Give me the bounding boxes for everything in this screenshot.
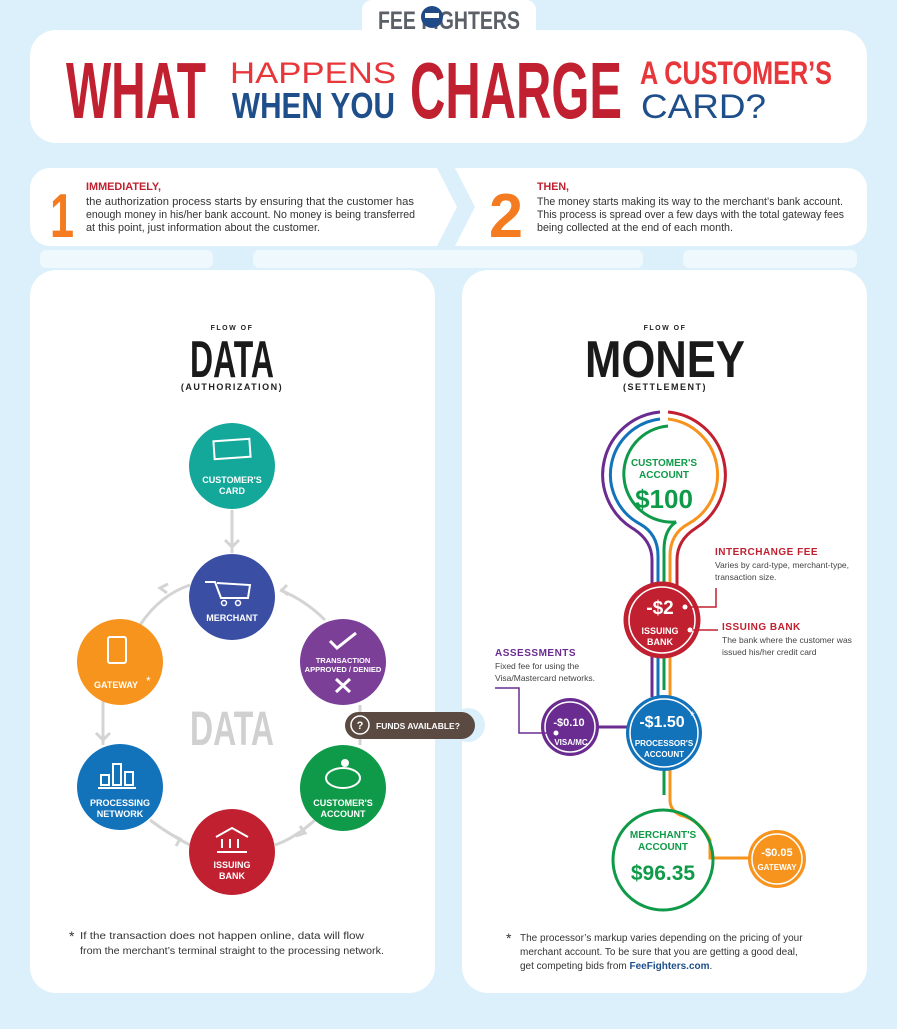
callout: assessments: ASSESSMENTS bbox=[495, 648, 576, 659]
node: merchant's account: $96.35 bbox=[631, 862, 695, 885]
node: customer's card: CARD bbox=[219, 486, 245, 496]
callout: assessments bbox=[495, 648, 595, 736]
node: customer's account $100: ACCOUNT bbox=[639, 470, 689, 481]
node: transaction approved / denied: APPROVED / DENIED bbox=[305, 665, 382, 674]
footnote: data: * bbox=[69, 928, 75, 944]
node: gateway: * bbox=[146, 674, 151, 688]
node: processing network: PROCESSING bbox=[90, 798, 150, 808]
node: merchant bbox=[189, 554, 275, 640]
node: visa/mc: VISA/MC bbox=[554, 738, 588, 747]
node: gateway fee bbox=[748, 830, 806, 888]
node: processor's account: ACCOUNT bbox=[644, 750, 684, 759]
heading: flow of money: FLOW OF bbox=[644, 325, 686, 332]
node: customer's account bbox=[300, 745, 386, 831]
node: gateway fee: -$0.05 bbox=[761, 847, 793, 859]
node: processor's account: * bbox=[690, 709, 695, 723]
node: issuing bank -$2: ISSUING bbox=[641, 626, 679, 636]
node: customer's account $100: CUSTOMER'S bbox=[631, 458, 697, 469]
step 1: at this point, just information about the customer. bbox=[86, 222, 320, 234]
callout: funds available bbox=[345, 708, 485, 742]
panel: flow of money bbox=[462, 270, 867, 993]
step 1: the authorization process starts by ensuring that the customer has bbox=[86, 196, 415, 208]
node: processing network: NETWORK bbox=[97, 809, 144, 819]
heading: flow of money: MONEY bbox=[585, 331, 745, 389]
node: visa/mc: -$0.10 bbox=[553, 717, 585, 729]
callout: assessments: Visa/Mastercard networks. bbox=[495, 673, 595, 683]
callout: issuing bank: issued his/her credit card bbox=[722, 647, 817, 657]
step 2: 2 bbox=[489, 182, 523, 251]
heading: flow of money: (SETTLEMENT) bbox=[623, 382, 707, 392]
node: customer's account: CUSTOMER'S bbox=[313, 798, 373, 808]
heading: flow of data: FLOW OF bbox=[211, 325, 253, 332]
node: issuing bank: BANK bbox=[219, 871, 245, 881]
node: issuing bank -$2: BANK bbox=[647, 637, 673, 647]
callout: assessments: Fixed fee for using the bbox=[495, 661, 579, 671]
footnote: money: * bbox=[506, 930, 512, 946]
node: customer's account $100 bbox=[631, 458, 697, 514]
node: merchant's account bbox=[613, 810, 713, 910]
callout: interchange fee bbox=[682, 547, 849, 610]
callout: interchange fee: INTERCHANGE FEE bbox=[715, 547, 818, 558]
title: A CUSTOMER’S bbox=[640, 55, 832, 91]
title: CHARGE bbox=[410, 46, 622, 135]
node: transaction approved / denied bbox=[300, 619, 386, 705]
footnote: data: If the transaction does not happen online, data will flow bbox=[80, 931, 365, 942]
step 2 bbox=[489, 181, 844, 251]
step 1: 1 bbox=[50, 182, 74, 251]
watermark: DATA: DATA bbox=[190, 703, 274, 756]
node: processing network bbox=[77, 744, 163, 830]
node: customer's account: ACCOUNT bbox=[320, 809, 366, 819]
callout: funds available: ? bbox=[357, 720, 364, 732]
node: gateway bbox=[77, 619, 163, 705]
money lines bbox=[595, 412, 752, 858]
node: customer's card: CUSTOMER'S bbox=[202, 475, 262, 485]
footnote: money: The processor’s markup varies depending on the pricing of your bbox=[520, 933, 803, 944]
logo tab: FEE FIGHTERS bbox=[378, 7, 520, 35]
footnote: data: from the merchant’s terminal straight to the processing network. bbox=[80, 946, 384, 957]
panel: flow of data bbox=[30, 270, 435, 993]
steps box bbox=[30, 168, 867, 251]
node: merchant's account: ACCOUNT bbox=[638, 842, 688, 853]
step 1: enough money in his/her bank account. No money is being transferred bbox=[86, 209, 415, 221]
heading: flow of data: (AUTHORIZATION) bbox=[181, 382, 283, 392]
node: customer's account $100: $100 bbox=[635, 484, 693, 514]
node: issuing bank: ISSUING bbox=[213, 860, 251, 870]
callout: issuing bank: The bank where the customer was bbox=[722, 635, 852, 645]
footnote: money: merchant account. To be sure that you are getting a good deal, bbox=[520, 947, 798, 958]
node: gateway fee: GATEWAY bbox=[757, 863, 797, 872]
logo tab bbox=[362, 0, 536, 40]
node: issuing bank -$2 bbox=[625, 583, 699, 657]
arrows ring bbox=[96, 510, 360, 846]
step 2: This process is spread over a few days with the total gateway fees bbox=[537, 209, 844, 221]
node: merchant: MERCHANT bbox=[206, 613, 258, 623]
callout: issuing bank: ISSUING BANK bbox=[722, 622, 801, 633]
title: CARD? bbox=[641, 88, 766, 126]
node: processor's account bbox=[626, 695, 702, 771]
heading: flow of data: DATA bbox=[190, 331, 274, 389]
step 1: IMMEDIATELY, bbox=[86, 181, 161, 193]
footnote: data bbox=[69, 928, 384, 957]
title bbox=[66, 46, 832, 135]
footnote: money: get competing bids from FeeFighters.com. bbox=[520, 961, 712, 972]
step 1 bbox=[50, 181, 415, 251]
step 2: being collected at the end of each month. bbox=[537, 222, 733, 234]
heading: flow of data bbox=[181, 325, 283, 392]
step 2: The money starts making its way to the merchant’s bank account. bbox=[537, 196, 843, 208]
header panel bbox=[30, 30, 867, 143]
node: issuing bank bbox=[189, 809, 275, 895]
callout: issuing bank bbox=[688, 622, 852, 657]
callout: funds available: FUNDS AVAILABLE? bbox=[376, 721, 460, 731]
title: WHEN YOU bbox=[232, 85, 395, 126]
node: merchant's account: MERCHANT'S bbox=[630, 830, 696, 841]
node: processor's account: -$1.50 bbox=[639, 714, 685, 731]
callout: interchange fee: Varies by card-type, merchant-type, bbox=[715, 560, 849, 570]
node: transaction approved / denied: TRANSACTION bbox=[316, 656, 370, 665]
node: customer's card bbox=[189, 423, 275, 509]
node: gateway: GATEWAY bbox=[94, 680, 138, 690]
node: issuing bank -$2: -$2 bbox=[646, 598, 674, 619]
callout: interchange fee: transaction size. bbox=[715, 572, 776, 582]
node: processor's account: PROCESSOR'S bbox=[635, 739, 694, 748]
footnote: money bbox=[506, 930, 803, 972]
title: WHAT bbox=[66, 46, 206, 135]
step 2: THEN, bbox=[537, 181, 569, 193]
title: HAPPENS bbox=[230, 57, 396, 90]
node: visa/mc bbox=[541, 698, 599, 756]
